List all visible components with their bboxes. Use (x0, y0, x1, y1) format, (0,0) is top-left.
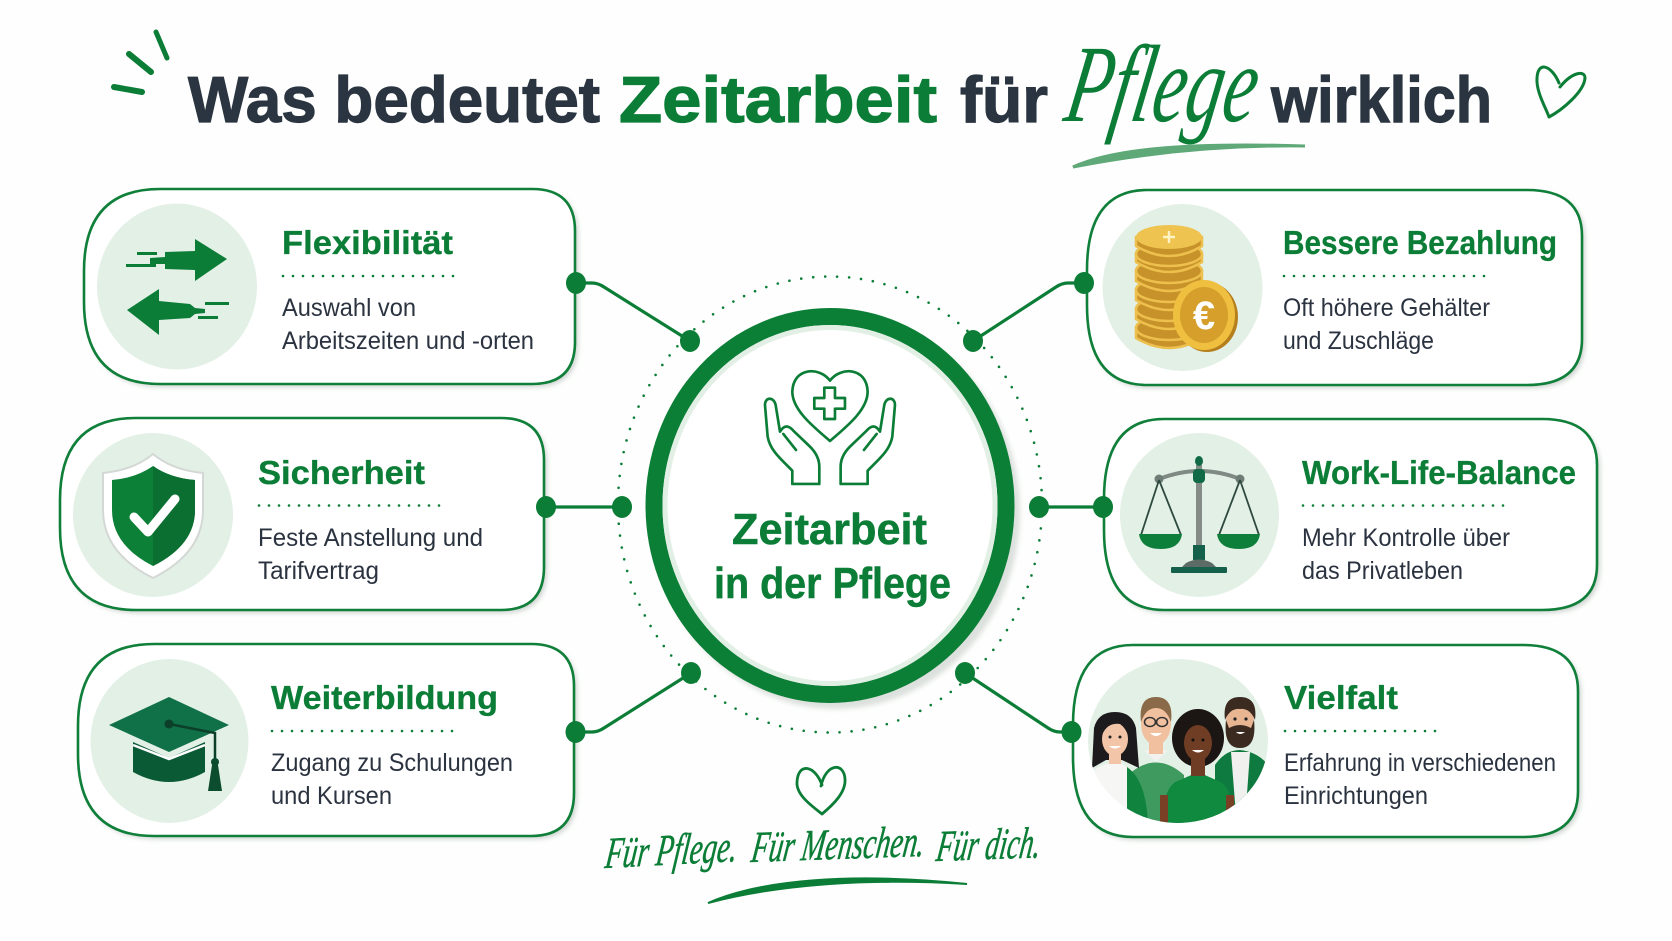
icon: shield (103, 454, 203, 578)
title: wirklich (1270, 63, 1492, 136)
panel: Vielfalt (1062, 645, 1581, 840)
icon: graduation cap (109, 697, 229, 791)
icon: group of people (1088, 659, 1268, 823)
footer brush underline (708, 878, 967, 903)
panel: Weiterbildung: und Kursen (271, 782, 392, 810)
panel: Bessere Bezahlung (1074, 190, 1585, 388)
panel: Work-Life-Balance (1093, 419, 1600, 613)
panel: Work-Life-Balance: Mehr Kontrolle über (1302, 524, 1510, 552)
icon: coins: € (1193, 294, 1215, 338)
panel: Vielfalt: Einrichtungen (1284, 782, 1428, 810)
footer tagline: Für dich. (933, 817, 1045, 871)
title (188, 23, 1492, 145)
icon: footer heart (797, 767, 845, 814)
panel: Sicherheit (60, 418, 556, 613)
panel: Weiterbildung (78, 644, 586, 839)
dotted orbit ring (618, 276, 1042, 732)
panel: Bessere Bezahlung: und Zuschläge (1283, 327, 1434, 355)
panel: Flexibilität (84, 189, 586, 387)
title: Zeitarbeit (619, 63, 937, 136)
panel: Sicherheit: Feste Anstellung und (258, 524, 483, 552)
title: Was bedeutet (188, 63, 600, 136)
center heading: in der Pflege (714, 559, 951, 608)
center heading: Zeitarbeit (732, 505, 927, 554)
panel: Flexibilität: Auswahl von (282, 294, 416, 322)
footer tagline: Für Pflege. (602, 821, 741, 878)
panel: Work-Life-Balance: das Privatleben (1302, 557, 1463, 585)
title: für (960, 63, 1048, 136)
panel: Weiterbildung: Zugang zu Schulungen (271, 749, 513, 777)
panel: Weiterbildung: Weiterbildung (271, 679, 498, 716)
icon: title sparks (114, 32, 167, 92)
title: Pflege (1057, 23, 1269, 145)
center heading (714, 505, 951, 608)
panel: Bessere Bezahlung: Bessere Bezahlung (1283, 224, 1557, 261)
panel: Bessere Bezahlung: Oft höhere Gehälter (1283, 294, 1490, 322)
icon: coins (1136, 225, 1238, 352)
footer tagline: Für Menschen. (748, 816, 929, 872)
panel: Vielfalt: Vielfalt (1284, 679, 1398, 716)
title brush underline (1073, 145, 1305, 167)
icon: balance scale (1139, 456, 1260, 573)
icon: title heart (1537, 67, 1585, 117)
panel: Sicherheit: Tarifvertrag (258, 557, 379, 585)
footer tagline (602, 816, 1045, 878)
connectors (546, 283, 1103, 732)
panel: Flexibilität: Arbeitszeiten und -orten (282, 327, 534, 355)
icon: hands holding heart (765, 371, 895, 484)
central circle (652, 315, 1020, 709)
panel: Flexibilität: Flexibilität (282, 224, 453, 261)
panel: Work-Life-Balance: Work-Life-Balance (1302, 454, 1576, 491)
icon: arrows (126, 239, 229, 335)
panel: Vielfalt: Erfahrung in verschiedenen (1284, 749, 1556, 777)
panel: Sicherheit: Sicherheit (258, 454, 425, 491)
